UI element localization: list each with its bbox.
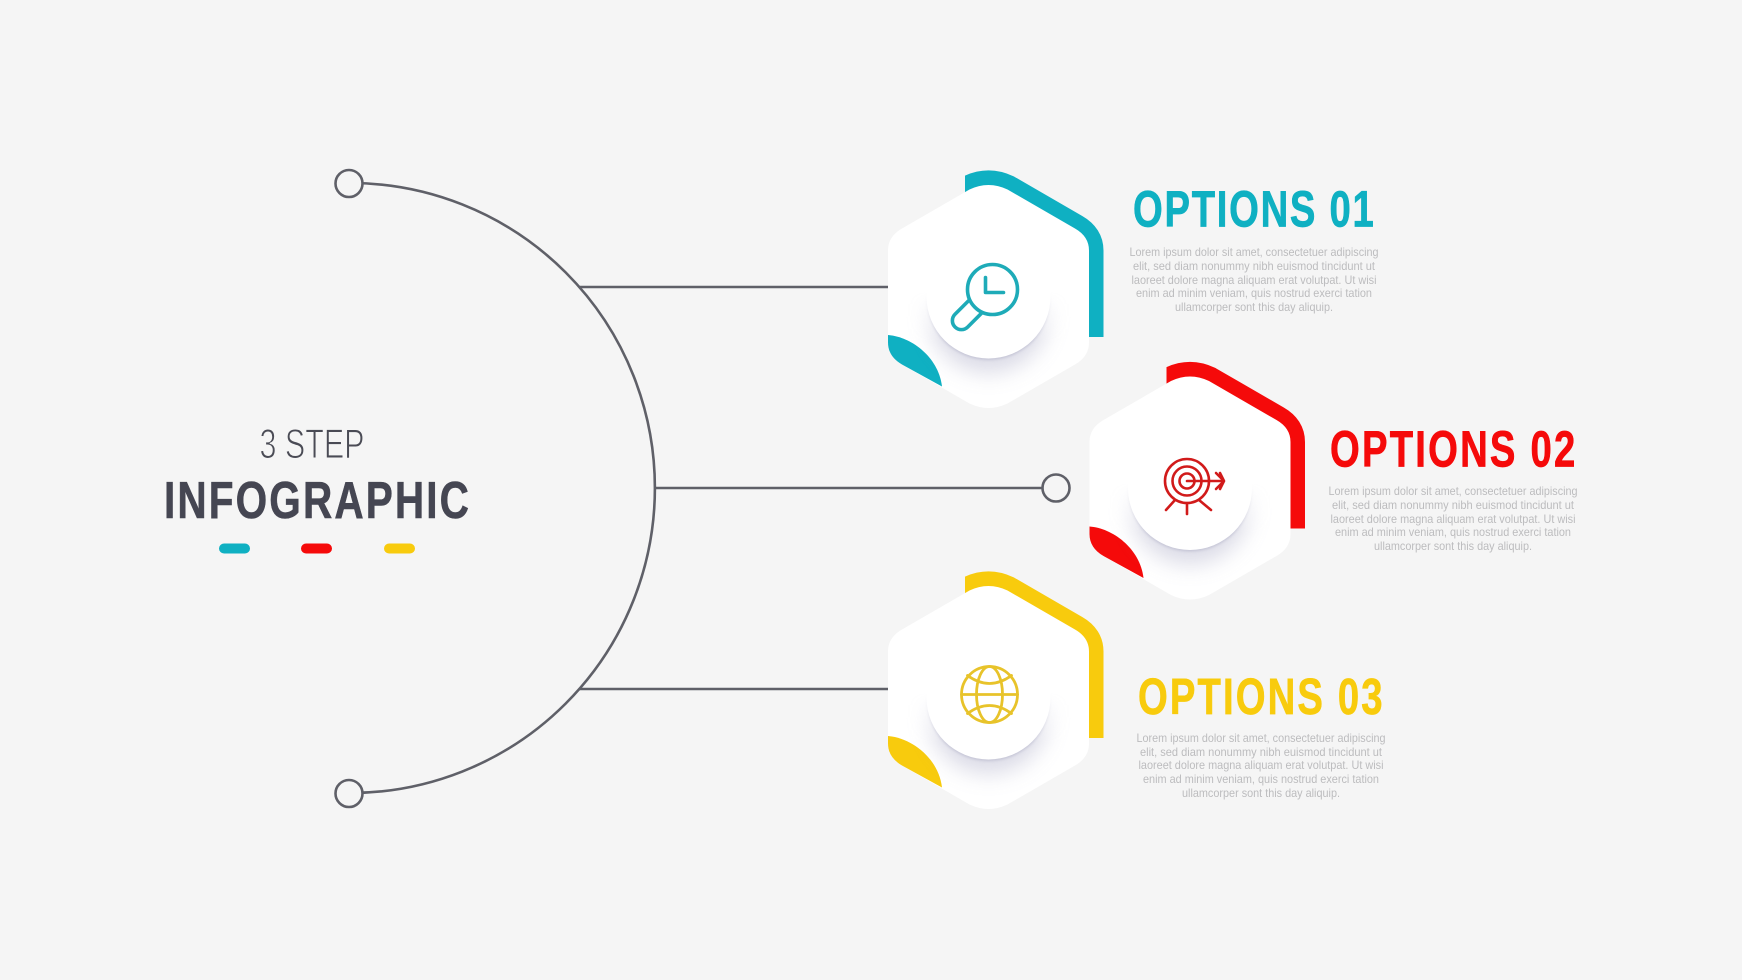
white hexagon — [1090, 376, 1290, 600]
text block: options 01: Lorem ipsum dolor sit amet, consectetuer adipiscing — [1130, 245, 1378, 259]
panel: option 01 hexagon — [888, 185, 1089, 408]
white hexagon — [888, 586, 1089, 809]
bottom end node — [336, 780, 362, 807]
corner leaf — [1090, 526, 1144, 578]
text block: options 01: ullamcorper sont this day aliquip. — [1175, 300, 1333, 314]
white hexagon — [888, 185, 1089, 408]
semicircle connector with lines — [336, 170, 1070, 807]
text block: options 01 — [1130, 245, 1378, 314]
title: infographic: INFOGRAPHIC — [164, 471, 469, 529]
colored band — [965, 571, 1104, 738]
top end node — [336, 170, 362, 197]
panel: option 02 hexagon — [1090, 376, 1290, 600]
title: 3 step: 3 STEP — [260, 420, 364, 467]
circle shadow — [926, 306, 1052, 380]
text block: options 02: ullamcorper sont this day aliquip. — [1374, 539, 1532, 553]
legend dash: red — [301, 544, 332, 554]
text block: options 03: laoreet dolore magna aliquam erat volutpat. Ut wisi — [1138, 758, 1384, 772]
text block: options 03: Lorem ipsum dolor sit amet, consectetuer adipiscing — [1136, 731, 1386, 745]
icon: globe — [962, 666, 1018, 722]
text block: options 01: elit, sed diam nonummy nibh euismod tincidunt ut — [1133, 259, 1376, 273]
text block: options 02: elit, sed diam nonummy nibh euismod tincidunt ut — [1332, 498, 1575, 512]
text block: options 02: laoreet dolore magna aliquam erat volutpat. Ut wisi — [1330, 512, 1576, 526]
inner circle — [926, 636, 1050, 760]
text block: options 01: laoreet dolore magna aliquam erat volutpat. Ut wisi — [1132, 273, 1376, 287]
panel: option 03 hexagon — [888, 586, 1089, 809]
circle shadow — [926, 707, 1052, 781]
icon: target with arrow — [1165, 459, 1224, 514]
text block: options 03: elit, sed diam nonummy nibh euismod tincidunt ut — [1140, 745, 1383, 759]
text block: options 01: enim ad minim veniam, quis nostrud exerci tation — [1136, 286, 1372, 300]
inner circle — [1128, 426, 1252, 550]
title block — [164, 420, 469, 554]
legend dash: yellow — [384, 544, 415, 554]
inner circle — [926, 234, 1050, 358]
corner leaf — [888, 335, 942, 386]
text block: options 03 — [1136, 731, 1386, 800]
circle shadow — [1126, 498, 1253, 572]
heading: options 02: OPTIONS 02 — [1330, 420, 1575, 478]
legend dash: teal — [219, 544, 250, 554]
corner leaf — [888, 736, 942, 788]
middle end node — [1042, 474, 1070, 502]
colored band — [1166, 362, 1305, 528]
heading: options 03: OPTIONS 03 — [1138, 668, 1383, 725]
text block: options 03: ullamcorper sont this day aliquip. — [1182, 786, 1340, 800]
text block: options 03: enim ad minim veniam, quis nostrud exerci tation — [1143, 772, 1379, 786]
line to option 02 — [655, 487, 1042, 489]
main arc — [350, 183, 655, 793]
text block: options 02: Lorem ipsum dolor sit amet, consectetuer adipiscing — [1328, 484, 1578, 498]
heading: options 01: OPTIONS 01 — [1133, 180, 1374, 238]
text block: options 02: enim ad minim veniam, quis nostrud exerci tation — [1335, 525, 1571, 539]
line to option 01 — [579, 286, 888, 288]
icon: magnifier with clock — [949, 264, 1018, 333]
colored band — [965, 170, 1104, 337]
line to option 03 — [579, 688, 888, 690]
text block: options 02 — [1328, 484, 1578, 553]
